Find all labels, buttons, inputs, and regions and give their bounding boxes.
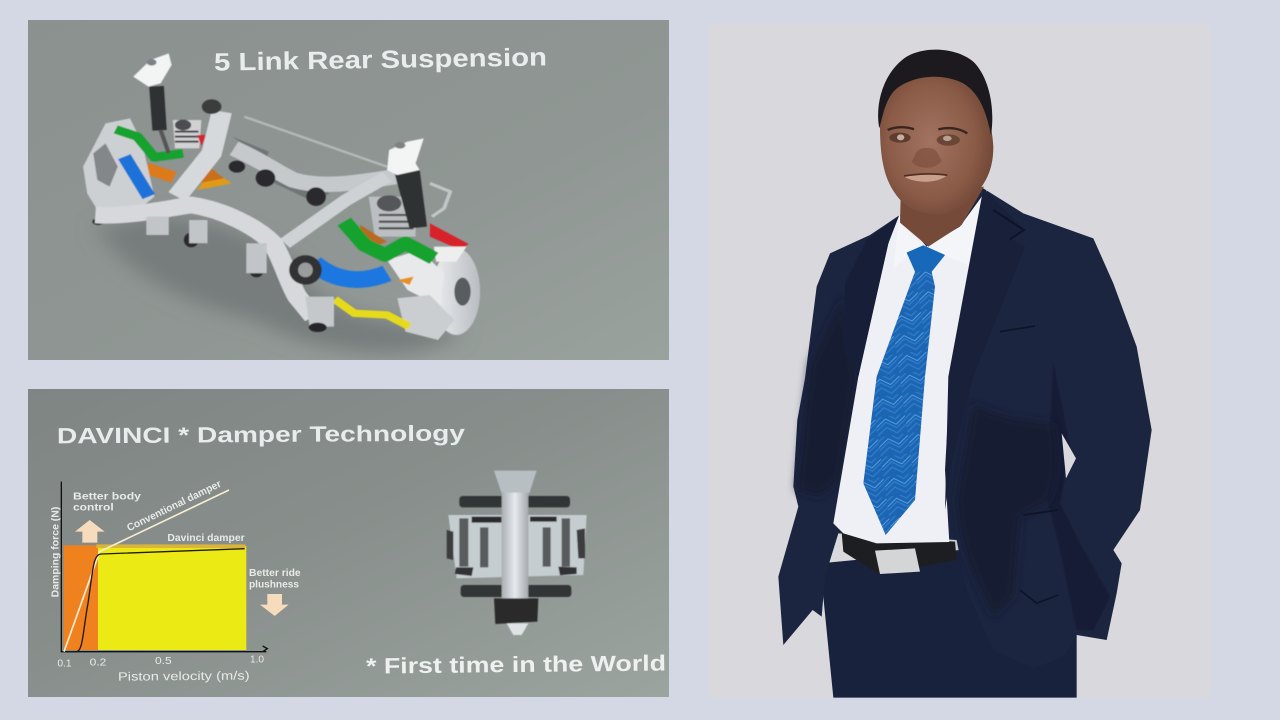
neck (900, 187, 984, 247)
shirt (833, 190, 987, 543)
right lapel (945, 188, 986, 510)
chart labels: 0.2 (90, 658, 106, 669)
chart labels: Damping force (N) (51, 507, 62, 597)
chart labels: Davinci damper (167, 533, 245, 544)
chart labels (51, 479, 301, 684)
belt buckle (875, 548, 920, 574)
arrow: better body control (75, 520, 105, 543)
left knuckle (83, 118, 154, 210)
main front crossmember (95, 205, 314, 317)
suit jacket (778, 188, 1152, 668)
bushings (92, 161, 326, 277)
conventional damper line (64, 490, 229, 652)
jacket pocket lines (1000, 326, 1058, 603)
illustration: suspension assembly (83, 53, 480, 353)
hair (878, 50, 992, 135)
left lapel (850, 216, 898, 376)
eyes (889, 133, 911, 143)
portrait: man in navy suit and blue tie (778, 50, 1152, 698)
arrow: better ride plushness (260, 594, 289, 616)
left strut (149, 86, 167, 131)
panel: DAVINCI damper technology (28, 389, 669, 697)
left blue link (124, 157, 149, 197)
red link right (430, 223, 469, 250)
eyebrows (888, 127, 967, 133)
shirt collar (927, 190, 986, 246)
nose (912, 148, 942, 168)
panel: portrait background (708, 24, 1210, 698)
right green link (344, 222, 434, 258)
chart labels: Conventional damper (125, 479, 223, 534)
note: first time in the world: * First time in the World (366, 650, 666, 679)
belt (842, 533, 957, 574)
heading: 5 Link Rear Suspension: 5 Link Rear Suspension (214, 43, 547, 77)
mouth (904, 174, 947, 182)
arm gap (1062, 433, 1076, 478)
chart labels: plushness (249, 579, 299, 590)
left green link (116, 129, 183, 157)
right strut (395, 170, 427, 228)
yellow region (96, 546, 246, 650)
left spring (173, 120, 201, 148)
chart labels: 1.0 (250, 655, 264, 666)
chart labels: Piston velocity (m/s) (118, 669, 250, 684)
orange and yellow links, left (146, 168, 174, 177)
chart labels: Better ride (249, 568, 301, 579)
necktie (863, 245, 945, 535)
chart labels: 0.5 (155, 656, 172, 667)
spring right (369, 197, 416, 237)
panel: 5 link rear suspension (28, 20, 669, 360)
heading: DAVINCI Damper Technology: DAVINCI * Damper Technology (57, 421, 466, 448)
bushings front right (289, 255, 322, 285)
right yellow link (335, 299, 409, 327)
orange region (64, 545, 98, 650)
right blue link (314, 263, 387, 280)
face (880, 68, 993, 214)
diagonal arm (177, 112, 222, 197)
axes (61, 482, 267, 652)
trousers (820, 550, 1077, 698)
sway bar (244, 117, 387, 167)
davinci damper line (66, 549, 245, 652)
illustration: damper cross-section (447, 471, 587, 635)
chart: damping force vs piston velocity (51, 479, 301, 684)
right knuckle and disc (433, 248, 480, 335)
chart labels: control (73, 503, 114, 514)
rear crossmember (232, 137, 330, 202)
chart labels: 0.1 (57, 659, 72, 670)
chart labels: Better body (73, 491, 141, 502)
